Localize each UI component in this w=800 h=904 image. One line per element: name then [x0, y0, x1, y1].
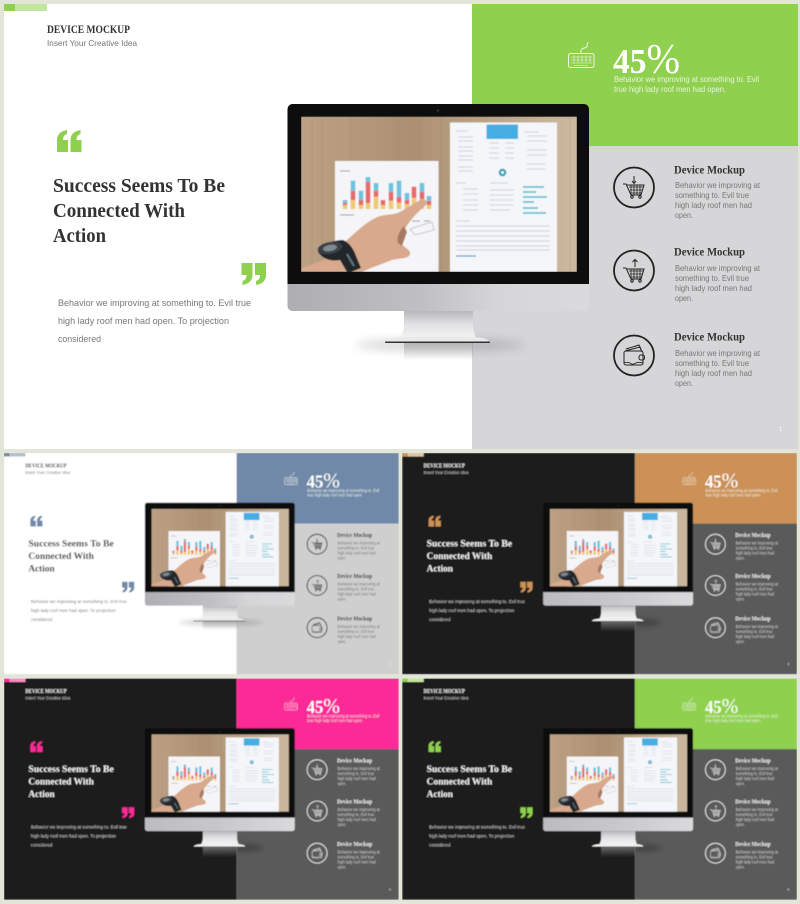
accent panel	[472, 4, 798, 146]
icon: closing quote	[242, 263, 266, 285]
title: DEVICE MOCKUP	[424, 689, 465, 695]
stat 45%: 45%	[705, 468, 738, 492]
paragraph	[58, 298, 251, 345]
item 3: open.	[337, 864, 346, 869]
item 1: Device Mockup	[735, 759, 771, 765]
item 1: Device Mockup	[337, 759, 372, 765]
monitor shadow	[178, 619, 263, 625]
item 2	[307, 574, 380, 602]
icon: keyboard	[683, 697, 696, 710]
item 1: high lady roof men had	[337, 550, 376, 555]
page number: 4	[389, 888, 391, 892]
page number: 1	[779, 427, 783, 433]
item 3: Device Mockup	[735, 616, 771, 622]
item 3	[307, 616, 380, 644]
monitor	[145, 503, 295, 630]
icon: keyboard	[285, 697, 297, 710]
icon: opening quote	[30, 741, 43, 752]
item 1: high lady roof men had	[675, 200, 752, 210]
item 2	[705, 800, 779, 827]
item 1: open.	[675, 210, 693, 220]
accent panel	[237, 678, 399, 749]
stat description: true high lady roof men had open.	[307, 493, 363, 498]
stat description: true high lady roof men had open.	[307, 718, 363, 723]
right gray panel	[237, 524, 399, 674]
slide 5: dark and green	[402, 678, 797, 900]
quote heading: Success Seems To Be	[427, 538, 513, 549]
subtitle: Insert Your Creative Idea	[424, 470, 469, 475]
quote heading: Connected With	[427, 551, 493, 562]
item 2	[705, 574, 779, 602]
item 1: Behavior we improving at	[337, 766, 380, 771]
item 3: Behavior we improving at	[337, 624, 380, 629]
item 1: open.	[736, 781, 745, 786]
quote heading: Action	[427, 789, 453, 800]
paragraph	[429, 599, 525, 623]
paragraph	[429, 825, 525, 848]
quote heading: Connected With	[53, 200, 185, 222]
item 3: Device Mockup	[337, 842, 372, 848]
item 2: Device Mockup	[337, 800, 372, 806]
item 2: high lady roof men had	[337, 592, 376, 597]
quote heading: Success Seems To Be	[427, 764, 513, 775]
corner tab	[402, 453, 424, 456]
monitor shadow	[626, 619, 661, 626]
title: DEVICE MOCKUP	[424, 463, 465, 469]
item 2: Device Mockup	[735, 574, 771, 580]
icon: opening quote	[57, 130, 82, 152]
slide 4: dark and pink	[4, 678, 399, 900]
monitor shadow	[228, 844, 263, 852]
item 3: high lady roof men had	[337, 634, 376, 639]
item 2: open.	[675, 293, 693, 303]
item 3: open.	[736, 864, 745, 869]
item 2: Behavior we improving at	[337, 807, 380, 812]
paragraph: high lady roof men had open. To projection	[58, 316, 229, 327]
item 2: high lady roof men had	[736, 592, 775, 597]
item 1: open.	[736, 555, 745, 560]
quote heading: Action	[53, 225, 106, 247]
accent panel	[635, 453, 797, 524]
item 2: something to. Evil true	[675, 273, 749, 283]
item 2: something to. Evil true	[736, 587, 773, 592]
item 2: Device Mockup	[735, 800, 771, 806]
subtitle: Insert Your Creative Idea	[47, 38, 137, 48]
quote heading	[53, 175, 225, 247]
stat description: Behavior we improving at something to. Evil	[307, 713, 379, 718]
item 2: Behavior we improving at	[736, 582, 779, 587]
corner tab	[402, 678, 424, 682]
item 2: high lady roof men had	[337, 817, 376, 822]
item 1: something to. Evil true	[736, 545, 773, 550]
monitor	[288, 104, 589, 360]
monitor shadow	[626, 844, 661, 852]
paragraph	[31, 825, 127, 848]
item 2: something to. Evil true	[736, 812, 773, 817]
item 1	[705, 533, 779, 560]
item 2: open.	[736, 822, 745, 827]
monitor base line	[385, 342, 490, 343]
item 2: Behavior we improving at	[675, 263, 761, 273]
item 1	[307, 759, 380, 786]
icon: keyboard	[285, 472, 297, 485]
quote heading: Success Seems To Be	[53, 175, 225, 197]
stat description: Behavior we improving at something to. Evil	[705, 488, 778, 493]
item 3: Behavior we improving at	[736, 849, 779, 854]
paragraph: high lady roof men had open. To projection	[31, 834, 116, 840]
item 1: Behavior we improving at	[736, 766, 779, 771]
item 3: something to. Evil true	[675, 358, 749, 368]
slide 2: white and blue	[4, 453, 399, 674]
subtitle: Insert Your Creative Idea	[25, 470, 71, 475]
item 3: something to. Evil true	[337, 854, 375, 859]
icon: opening quote	[30, 516, 43, 527]
stat 45%: 45%	[307, 694, 340, 718]
paragraph: Behavior we improving at something to. Evil true	[31, 825, 127, 831]
paragraph: considered	[429, 617, 451, 623]
item 1: Behavior we improving at	[337, 540, 380, 545]
item 1: something to. Evil true	[337, 545, 375, 550]
right gray panel	[472, 146, 798, 449]
item 3: high lady roof men had	[736, 859, 775, 864]
quote heading: Success Seems To Be	[28, 538, 114, 549]
monitor shadow	[355, 339, 525, 351]
item 3: something to. Evil true	[337, 629, 375, 634]
item 2: something to. Evil true	[337, 812, 375, 817]
title: DEVICE MOCKUP	[25, 689, 67, 695]
stat description: Behavior we improving at something to. Evil	[307, 488, 379, 493]
accent panel	[237, 453, 399, 524]
page number: 3	[787, 662, 789, 666]
monitor	[543, 503, 693, 631]
left panel	[402, 453, 635, 674]
item 1: Device Mockup	[735, 533, 771, 539]
icon: opening quote	[429, 741, 441, 752]
item 1: something to. Evil true	[736, 771, 773, 776]
corner tab	[4, 453, 25, 456]
item 2: Device Mockup	[337, 574, 372, 580]
item 3: Device Mockup	[337, 616, 372, 622]
item 1: high lady roof men had	[736, 550, 775, 555]
accent panel	[635, 678, 797, 749]
item 3	[705, 616, 779, 644]
item 1: high lady roof men had	[736, 776, 775, 781]
stat description	[705, 488, 778, 498]
item 3: Device Mockup	[674, 332, 745, 344]
item 3: Device Mockup	[735, 842, 771, 848]
stat description: true high lady roof men had open.	[705, 493, 761, 498]
quote heading: Action	[28, 789, 55, 800]
stat description	[614, 74, 759, 94]
item 1: high lady roof men had	[337, 776, 376, 781]
paragraph: Behavior we improving at something to. Evil true	[429, 599, 525, 605]
item 1: open.	[337, 555, 346, 560]
item 2	[614, 247, 761, 303]
item 3: open.	[337, 639, 346, 644]
right gray panel	[635, 749, 797, 900]
item 3: high lady roof men had	[675, 368, 752, 378]
item 2: open.	[337, 597, 346, 602]
stat description: Behavior we improving at something to. Evil	[705, 713, 778, 718]
item 1	[705, 759, 779, 786]
quote heading	[28, 764, 114, 800]
stat description: true high lady roof men had open.	[705, 718, 761, 723]
quote heading	[427, 764, 513, 800]
stat description: Behavior we improving at something to. Evil	[614, 74, 759, 84]
item 3: something to. Evil true	[736, 629, 773, 634]
item 3	[614, 332, 761, 388]
item 2: Behavior we improving at	[736, 807, 779, 812]
left panel	[4, 678, 237, 900]
monitor	[543, 728, 693, 857]
item 2: high lady roof men had	[736, 817, 775, 822]
quote heading	[28, 538, 114, 574]
item 2	[307, 800, 380, 827]
item 1: Device Mockup	[337, 533, 372, 539]
quote heading: Success Seems To Be	[28, 764, 114, 775]
corner tab	[4, 678, 25, 682]
icon: closing quote	[122, 807, 134, 818]
icon: closing quote	[520, 807, 533, 818]
stat 45%: 45%	[705, 694, 738, 718]
slide 3: dark and orange	[402, 453, 797, 674]
item 2: Behavior we improving at	[337, 582, 380, 587]
item 1	[307, 533, 380, 560]
item 2: something to. Evil true	[337, 587, 375, 592]
item 3: Behavior we improving at	[736, 624, 779, 629]
quote heading: Connected With	[427, 776, 493, 787]
icon: keyboard	[683, 472, 696, 485]
item 3: open.	[736, 639, 745, 644]
paragraph: high lady roof men had open. To projection	[31, 608, 116, 614]
item 1: open.	[337, 781, 346, 786]
item 3: something to. Evil true	[736, 854, 773, 859]
item 3: high lady roof men had	[736, 634, 775, 639]
paragraph: considered	[58, 334, 101, 345]
item 3: high lady roof men had	[337, 859, 376, 864]
quote heading: Connected With	[28, 551, 94, 562]
left panel	[4, 4, 472, 449]
right gray panel	[237, 749, 399, 900]
item 1: something to. Evil true	[675, 190, 749, 200]
item 3	[307, 842, 380, 869]
item 1: Device Mockup	[674, 164, 745, 176]
quote heading: Action	[427, 563, 453, 574]
right gray panel	[635, 524, 797, 674]
monitor	[145, 728, 295, 857]
item 1: something to. Evil true	[337, 771, 375, 776]
stat description: true high lady roof men had open.	[614, 84, 726, 94]
left panel	[402, 678, 635, 900]
paragraph: considered	[429, 842, 451, 848]
slide 1: white and green	[4, 4, 798, 449]
subtitle: Insert Your Creative Idea	[25, 695, 71, 700]
quote heading: Connected With	[28, 776, 94, 787]
paragraph: high lady roof men had open. To projection	[429, 608, 514, 614]
quote heading: Action	[28, 563, 55, 574]
item 2: open.	[337, 822, 346, 827]
title: DEVICE MOCKUP	[47, 24, 130, 36]
paragraph: high lady roof men had open. To projection	[429, 834, 514, 840]
paragraph: considered	[31, 842, 53, 848]
item 3	[705, 842, 779, 869]
corner tab	[4, 4, 47, 11]
item 3: open.	[675, 378, 693, 388]
paragraph: Behavior we improving at something to. Evil true	[429, 825, 525, 831]
item 2: open.	[736, 597, 745, 602]
icon: opening quote	[429, 516, 441, 527]
left panel	[4, 453, 237, 674]
icon: closing quote	[122, 582, 134, 593]
paragraph: considered	[31, 617, 53, 623]
item 1	[614, 164, 761, 220]
stat 45%: 45%	[307, 468, 340, 492]
stat description	[307, 713, 379, 723]
item 3: Behavior we improving at	[675, 348, 761, 358]
title: DEVICE MOCKUP	[25, 463, 67, 469]
quote heading	[427, 538, 513, 574]
item 3: Behavior we improving at	[337, 849, 380, 854]
page number: 5	[787, 888, 789, 892]
page number: 2	[389, 662, 391, 666]
stat 45%: 45%	[613, 37, 680, 83]
stat description	[705, 713, 778, 723]
stat description	[307, 488, 379, 498]
paragraph	[31, 599, 127, 623]
monitor base line	[193, 620, 246, 622]
item 2: high lady roof men had	[675, 283, 752, 293]
paragraph: Behavior we improving at something to. Evil true	[58, 298, 251, 309]
icon: closing quote	[520, 582, 533, 593]
item 1: Behavior we improving at	[675, 180, 761, 190]
paragraph: Behavior we improving at something to. Evil true	[31, 599, 127, 605]
icon: keyboard	[568, 42, 594, 68]
item 1: Behavior we improving at	[736, 540, 779, 545]
item 2: Device Mockup	[674, 247, 745, 259]
subtitle: Insert Your Creative Idea	[424, 695, 469, 700]
